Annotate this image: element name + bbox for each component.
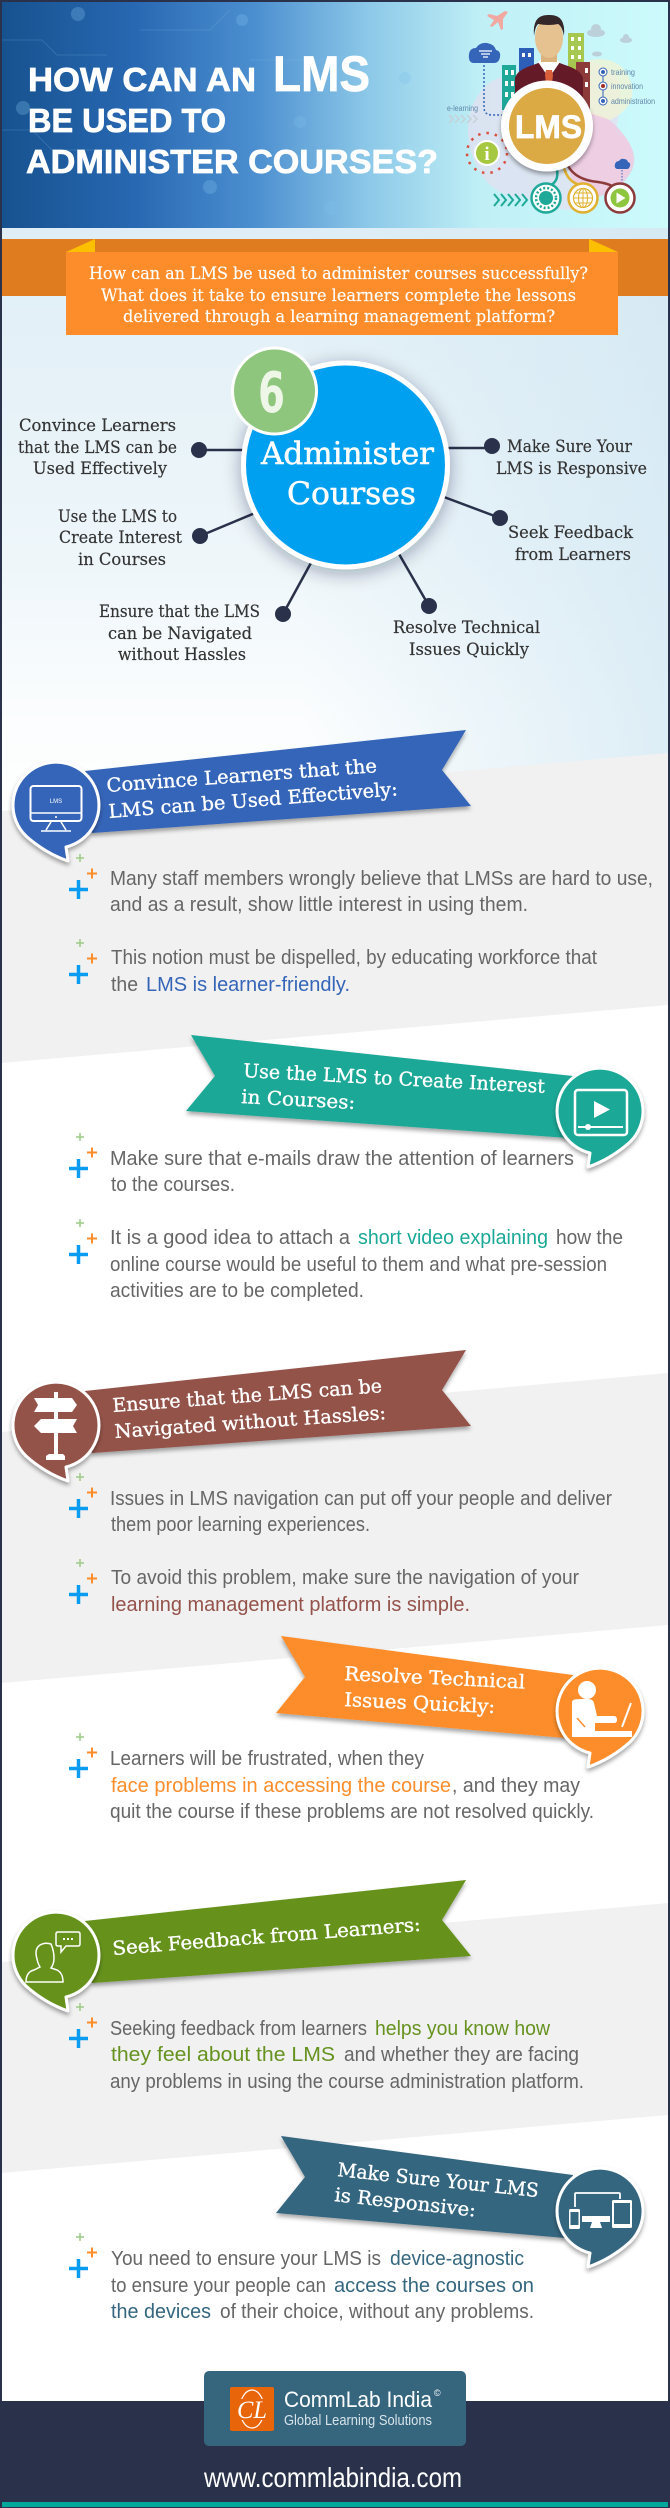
bullet 2 — [69, 939, 97, 984]
text: any problems in using the course administration platform. — [110, 2070, 584, 2093]
logo mark — [230, 2387, 274, 2431]
spoke: technical issues — [393, 554, 540, 660]
text 2: To avoid this problem, make sure the navigation of your — [111, 1566, 579, 1589]
small clouds — [587, 24, 632, 56]
text 1: them poor learning experiences. — [111, 1513, 370, 1536]
plane — [487, 11, 508, 30]
cloud with link — [469, 43, 502, 115]
connector curves — [549, 166, 618, 190]
icon: monitor: LMS — [50, 799, 62, 805]
ribbon — [276, 2136, 573, 2238]
buildings — [502, 33, 590, 110]
ribbon — [85, 1350, 471, 1453]
bubble — [13, 762, 99, 861]
footer band — [0, 2401, 670, 2508]
spoke: convince learners: that the LMS can be — [18, 438, 177, 458]
heading: in Courses: — [241, 1086, 356, 1114]
heading: Convince Learners that the — [106, 755, 378, 797]
text: and whether they are facing — [344, 2043, 579, 2066]
icon: devices — [569, 2193, 632, 2229]
spoke: navigation — [99, 561, 312, 665]
labels: training innovation administration: innovation — [611, 81, 643, 91]
heading: Seek Feedback from Learners: — [112, 1914, 421, 1960]
gray band 3 — [2, 1373, 668, 1683]
bubble — [557, 2168, 643, 2267]
company name: © — [434, 2388, 441, 2398]
text: Learners will be frustrated, when they — [110, 1747, 425, 1770]
bubble — [557, 1068, 643, 1167]
heading: Use the LMS to Create Interest — [243, 1060, 546, 1098]
heading: LMS can be Used Effectively: — [108, 778, 398, 823]
intro background — [2, 228, 668, 828]
bubble — [557, 1668, 643, 1767]
number badge 6: 6 — [258, 361, 285, 426]
bullet — [69, 1733, 97, 1778]
text — [110, 2017, 584, 2093]
text: You need to ensure your LMS is — [111, 2247, 381, 2270]
spoke: convince learners: Convince Learners — [19, 416, 176, 436]
section 6: responsive — [69, 2136, 643, 2323]
text: device-agnostic — [390, 2247, 524, 2270]
labels: training innovation administration: training — [611, 67, 635, 77]
section 5: feedback — [13, 1880, 584, 2093]
spoke: navigation: without Hassles — [118, 645, 246, 665]
text 1: and as a result, show little interest in using them. — [110, 893, 528, 916]
header banner — [2, 2, 668, 228]
labels: training innovation administration: administration — [611, 96, 655, 106]
icon: person at laptop — [572, 1681, 632, 1737]
spoke: responsive: Make Sure Your — [507, 437, 633, 457]
bullet — [69, 2233, 97, 2278]
text 1: Issues in LMS navigation can put off your people and deliver — [110, 1487, 612, 1510]
man — [515, 15, 583, 100]
text: face problems in accessing the course — [111, 1774, 451, 1797]
spoke: technical issues: Issues Quickly — [409, 640, 529, 660]
company name: Global Learning Solutions — [284, 2413, 432, 2429]
text 2: learning management platform is simple. — [111, 1593, 470, 1616]
spoke: navigation: can be Navigated — [108, 624, 252, 644]
title: HOW CAN AN — [28, 61, 256, 98]
icon: gear — [532, 184, 560, 212]
text: they feel about the LMS — [111, 2043, 335, 2066]
text 2: short video explaining — [358, 1226, 548, 1249]
intro ribbon — [2, 239, 668, 335]
text 2 — [110, 1226, 623, 1302]
icon: monitor — [30, 786, 82, 831]
bullet 1 — [69, 1473, 97, 1518]
center circle — [244, 363, 448, 567]
text: access the courses on — [334, 2274, 534, 2297]
spoke: convince learners — [18, 416, 243, 479]
footer strip — [2, 2502, 668, 2507]
bullet 2 — [69, 1219, 97, 1264]
ribbon — [85, 1880, 471, 1983]
bubble — [13, 1912, 99, 2011]
ribbon — [85, 730, 471, 833]
text: of their choice, without any problems. — [220, 2300, 534, 2323]
heading: Make Sure Your LMS — [336, 2159, 540, 2202]
heading — [241, 1060, 546, 1114]
section 4: technical issues — [69, 1636, 643, 1823]
bullet 1 — [69, 1133, 97, 1178]
text: , and they may — [452, 1774, 581, 1797]
spoke: create interest — [58, 507, 255, 570]
section 3: navigation — [13, 1350, 612, 1616]
bullet 2 — [69, 1559, 97, 1604]
text: the devices — [111, 2300, 211, 2323]
text 2: how the — [556, 1226, 623, 1249]
header illustration: LMS hub — [447, 11, 655, 212]
icon: play — [606, 184, 634, 212]
LMS circle — [501, 80, 593, 172]
text 2: LMS is learner-friendly. — [146, 973, 350, 996]
title — [26, 46, 438, 180]
text 2: This notion must be dispelled, by educating workforce that — [111, 946, 597, 969]
spoke: responsive: LMS is Responsive — [496, 459, 647, 479]
spoke: feedback: from Learners — [515, 545, 631, 565]
text 2 — [111, 1566, 579, 1616]
text 1: to the courses. — [111, 1173, 235, 1196]
icon: info circle — [467, 133, 507, 173]
text — [111, 2247, 534, 2323]
gray band 5 — [2, 1903, 668, 2173]
spoke: technical issues: Resolve Technical — [393, 618, 540, 638]
bottom chevrons — [494, 194, 527, 206]
heading — [106, 755, 398, 823]
text 1 — [110, 1147, 574, 1196]
bullet — [69, 2003, 97, 2048]
bubble — [13, 1382, 99, 1481]
heading: Ensure that the LMS can be — [112, 1375, 383, 1417]
ribbon — [276, 1636, 573, 1738]
label: e-learning — [447, 103, 478, 123]
icon: person with speech bubble — [26, 1932, 80, 1982]
icon: video player — [575, 1090, 627, 1135]
spoke: create interest: Create Interest — [59, 528, 182, 548]
intro ribbon: delivered through a learning management platform? — [123, 307, 555, 326]
company name — [284, 2387, 441, 2429]
heading — [333, 2159, 540, 2222]
text 1 — [110, 867, 653, 916]
section 2: create interest — [69, 1035, 643, 1302]
logo panel — [204, 2371, 466, 2446]
spoke: navigation: Ensure that the LMS — [99, 602, 260, 622]
text: Seeking feedback from learners — [110, 2017, 367, 2040]
number badge 6 — [232, 348, 316, 434]
spoke: convince learners: Used Effectively — [33, 459, 167, 479]
text — [110, 1747, 594, 1823]
text: helps you know how — [375, 2017, 550, 2040]
spoke: create interest: in Courses — [78, 550, 166, 570]
heading: Resolve Technical — [344, 1663, 526, 1694]
spoke: feedback — [444, 497, 634, 565]
spoke: responsive — [448, 437, 647, 479]
text: quit the course if these problems are not resolved quickly. — [110, 1800, 594, 1823]
text: to ensure your people can — [111, 2274, 326, 2297]
text 2: activities are to be completed. — [110, 1279, 364, 1302]
bullet 1 — [69, 854, 97, 899]
company name: CommLab India — [284, 2387, 433, 2412]
small cloud — [615, 159, 630, 182]
logo mark: CL — [237, 2397, 267, 2424]
text 2: the — [111, 973, 138, 996]
icon: info circle: i — [484, 144, 490, 165]
icon: globe — [568, 184, 598, 212]
spoke: feedback: Seek Feedback — [508, 523, 634, 543]
heading: Navigated without Hassles: — [114, 1402, 387, 1443]
intro ribbon: What does it take to ensure learners complete the lessons — [101, 286, 576, 305]
website url: www.commlabindia.com — [203, 2462, 462, 2493]
text 2: online course would be useful to them and what pre-session — [110, 1253, 607, 1276]
heading: is Responsive: — [333, 2184, 477, 2222]
center circle: Administer — [260, 436, 434, 472]
title: LMS — [273, 46, 370, 102]
gray band 1 — [2, 753, 668, 1063]
section 1: convince learners — [13, 730, 653, 996]
text 2: It is a good idea to attach a — [110, 1226, 351, 1249]
label: e-learning: e-learning — [447, 103, 478, 113]
text 1: Make sure that e-mails draw the attention of learners — [110, 1147, 574, 1170]
LMS circle: LMS — [515, 109, 582, 145]
spoke: create interest: Use the LMS to — [58, 507, 177, 527]
title: BE USED TO — [28, 102, 226, 139]
intro ribbon: How can an LMS be used to administer courses successfully? — [89, 264, 588, 283]
icon: signpost — [34, 1392, 77, 1460]
ribbon — [186, 1035, 573, 1138]
labels: training innovation administration — [599, 67, 655, 106]
text 1 — [110, 1487, 612, 1536]
heading — [344, 1663, 526, 1718]
pastel map blobs — [468, 59, 634, 210]
heading: Issues Quickly: — [344, 1689, 496, 1718]
center circle: Courses — [287, 476, 416, 512]
text 2 — [111, 946, 597, 996]
heading — [112, 1375, 387, 1443]
title: ADMINISTER COURSES? — [26, 143, 438, 180]
